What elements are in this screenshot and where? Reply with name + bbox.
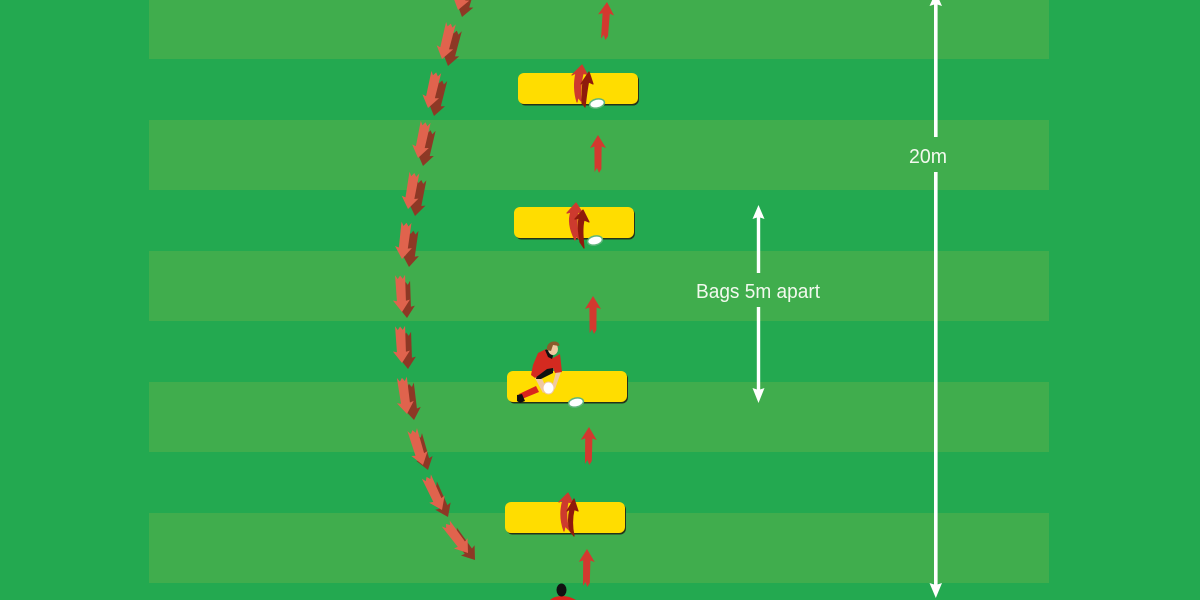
label: bags 5m apart: Bags 5m apart [696, 281, 820, 303]
20m dimension arrow [930, 0, 942, 598]
ball carrier curved run arrows over bags [559, 65, 593, 536]
5m spacing dimension arrow [752, 205, 764, 403]
tackle bag 4 [505, 502, 626, 534]
tackle bag 2 [514, 207, 635, 240]
mown pitch stripes [149, 0, 1049, 583]
rugby balls on the ground [568, 98, 605, 408]
straight pass arrows [578, 1, 615, 587]
player at the bottom, partly off the page [550, 584, 576, 600]
tackle bag 1 [518, 73, 639, 106]
label: 20m: 20m [909, 146, 947, 168]
tackle bag 3 [507, 371, 628, 404]
support runner curved line of arrows [392, 0, 482, 565]
player picking up the ball [517, 341, 562, 403]
